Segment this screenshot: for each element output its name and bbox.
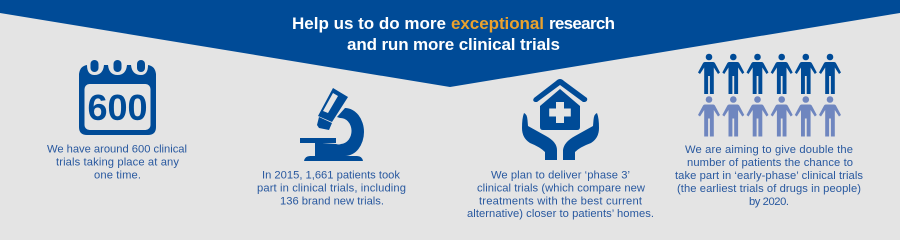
banner: [0, 0, 900, 87]
title: and run more clinical trials: [347, 35, 560, 54]
icon: microscope: [300, 88, 364, 161]
panel: early-phase: [675, 54, 863, 208]
icon: calendar: 600: [88, 87, 148, 128]
text: early-phase: take part in ‘early-phase’ clinical trials: [675, 170, 863, 182]
text: 1,661 patients: part in clinical trials, including: [257, 182, 406, 194]
icon: house in hands: [522, 79, 599, 160]
text: phase 3: clinical trials (which compare new: [477, 182, 646, 194]
panel: 1,661 patients: [257, 88, 406, 207]
title: [292, 14, 615, 54]
text: 600 trials: trials taking place at any: [56, 157, 179, 169]
text: phase 3: [467, 170, 654, 220]
text: phase 3: We plan to deliver ‘phase 3’: [491, 170, 630, 182]
text: early-phase: [675, 144, 863, 208]
text: 600 trials: We have around 600 clinical: [47, 144, 187, 156]
text: 1,661 patients: In 2015, 1,661 patients took: [262, 170, 400, 182]
text: 600 trials: one time.: [94, 170, 141, 182]
icon: people: [698, 54, 841, 137]
text: 1,661 patients: 136 brand new trials.: [280, 195, 384, 207]
panel: phase 3: [467, 79, 654, 220]
title: Help us to do more: [292, 14, 446, 33]
text: 1,661 patients: [257, 170, 406, 207]
title: exceptional: [451, 14, 544, 33]
text: phase 3: alternative) closer to patients’ homes.: [467, 208, 654, 220]
text: early-phase: We are aiming to give double the: [685, 144, 853, 156]
panel: 600 trials: [47, 60, 187, 182]
text: early-phase: (the earliest trials of drugs in people): [677, 183, 861, 195]
text: early-phase: by 2020.: [749, 196, 789, 208]
text: phase 3: treatments with the best current: [479, 195, 643, 207]
text: 600 trials: [47, 144, 187, 182]
title: research: [549, 14, 615, 33]
text: early-phase: number of patients the chance to: [687, 157, 853, 169]
